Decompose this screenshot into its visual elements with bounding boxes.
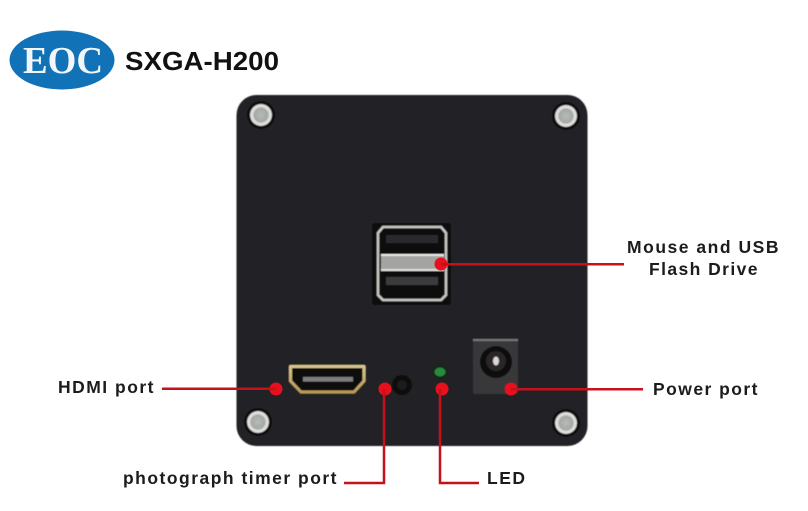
callout: HDMI line xyxy=(162,382,282,396)
logo: EOC xyxy=(10,30,114,90)
icon: bottom-right screw xyxy=(552,409,580,437)
callout: USB line xyxy=(434,258,624,270)
icon: HDMI port xyxy=(290,366,364,392)
title: SXGA-H200 xyxy=(125,46,279,76)
icon: power jack xyxy=(473,339,518,394)
label: HDMI port: HDMI port xyxy=(58,377,154,397)
panel: camera back plate xyxy=(236,95,588,446)
label: Mouse and USB Flash Drive: Mouse and USB xyxy=(627,237,778,257)
icon: bottom-left screw xyxy=(244,408,272,436)
icon: top-left screw xyxy=(247,101,275,129)
label: photograph timer port: photograph timer port xyxy=(123,468,337,488)
logo: EOC: EOC xyxy=(23,40,103,82)
label: Power port: Power port xyxy=(653,379,758,399)
callout: LED line xyxy=(436,382,479,483)
label: Mouse and USB Flash Drive: Flash Drive xyxy=(649,259,758,279)
callout: power line xyxy=(504,382,643,396)
icon: green LED xyxy=(432,364,448,380)
icon: top-right screw xyxy=(552,102,580,130)
label: LED: LED xyxy=(487,468,525,488)
icon: dual USB port xyxy=(372,223,451,305)
icon: photograph timer jack xyxy=(392,375,412,395)
callout: photograph timer line xyxy=(344,382,392,483)
label: Mouse and USB Flash Drive xyxy=(627,237,778,279)
